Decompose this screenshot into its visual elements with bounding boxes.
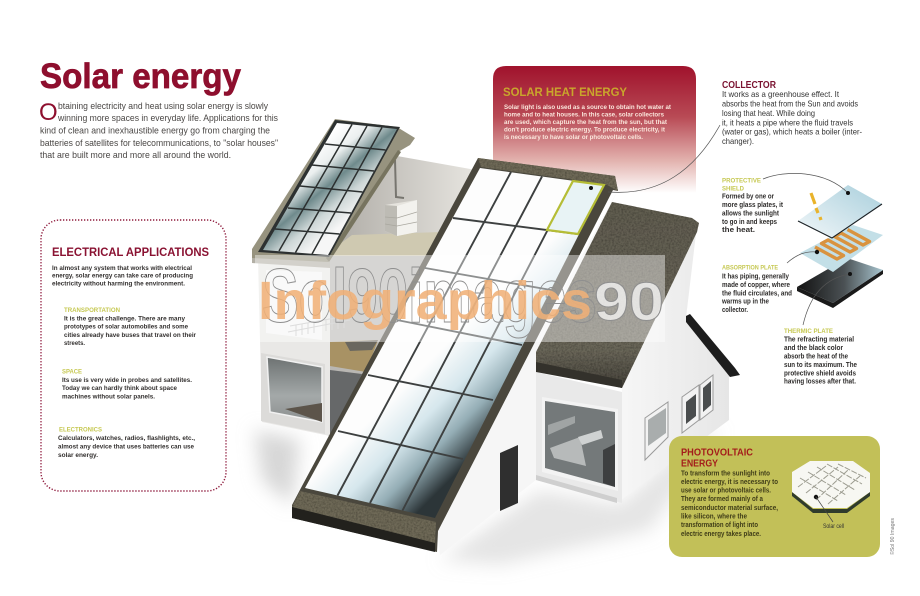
intro text: btaining electricity and heat using solar energy is slowly — [58, 101, 268, 111]
thermic plate text: The refracting material — [784, 337, 854, 344]
thermic plate text: protective shield avoids — [784, 370, 856, 377]
transportation block: streets. — [64, 340, 85, 347]
protective shield text: the heat. — [722, 227, 755, 234]
railing — [288, 315, 352, 336]
attic floor — [322, 232, 442, 258]
photovoltaic text: like silicon, where the — [681, 514, 747, 520]
electrical intro text: electricity without harming the environment. — [52, 280, 185, 287]
highlighted collector — [547, 181, 604, 234]
house illustration — [252, 119, 740, 565]
wood floor — [330, 340, 378, 372]
credit: ©Sol 90 Images — [889, 518, 896, 555]
thermic plate text — [784, 328, 857, 386]
solar heat text: don't produce electric energy. To produce electricity, it — [504, 126, 666, 134]
electrical intro text: In almost any system that works with electrical — [52, 265, 192, 272]
eave — [292, 491, 436, 543]
solar heat text: home and to heat houses. In this case, solar collectors — [504, 112, 664, 119]
intro text: that are built more and more all around the world. — [40, 150, 231, 160]
panel: solar heat energy — [493, 66, 696, 193]
thermic plate text: and the black color — [784, 345, 843, 352]
solar heat text: Solar light is also used as a source to obtain hot water at — [504, 104, 672, 111]
thermic plate text: THERMIC PLATE — [784, 328, 834, 335]
lower window — [261, 353, 325, 434]
ridge — [478, 158, 618, 191]
left solar panels — [258, 120, 400, 257]
solar cell label: Solar cell — [823, 524, 844, 530]
watermark: 90 — [594, 272, 664, 332]
heading: electrical applications: ELECTRICAL APPLICATIONS — [52, 247, 209, 259]
electronics block: ELECTRONICS — [59, 427, 103, 434]
side wall — [617, 225, 729, 503]
photovoltaic text: electric energy, it is necessary to — [681, 479, 778, 486]
absorption plate text: collector. — [722, 307, 748, 314]
pipe — [395, 160, 404, 198]
heading: photovoltaic energy: ENERGY — [681, 459, 718, 470]
collector text: (water or gas), which heats a boiler (inter- — [722, 128, 862, 136]
thermic plate text: absorb the heat of the — [784, 354, 848, 361]
space block: Its use is very wide in probes and satellites. — [62, 377, 192, 384]
heading: solar heat energy: SOLAR HEAT ENERGY — [503, 85, 627, 99]
watermark: Sol90images — [262, 254, 597, 339]
protective shield text: PROTECTIVE — [722, 178, 762, 184]
collector text: changer). — [722, 137, 754, 146]
space block — [62, 369, 192, 401]
transportation block: cities already have buses that travel on their — [64, 332, 196, 339]
arrow: protective shield callout — [763, 173, 850, 195]
collector text — [722, 80, 862, 146]
drop cap: O — [39, 99, 58, 126]
watermark: Infographics — [258, 271, 592, 331]
door — [500, 445, 518, 511]
protective shield text: more glass plates, it — [722, 202, 784, 209]
electrical intro text — [52, 265, 193, 287]
collector exploded diagram — [797, 185, 883, 308]
protective shield text: to go in and keeps — [722, 219, 777, 226]
panel: photovoltaic energy — [669, 436, 880, 557]
title: Solar energy — [40, 57, 241, 96]
front wall — [258, 258, 330, 436]
icon: solar cell — [792, 461, 870, 530]
right house — [436, 190, 740, 555]
sun rays — [811, 193, 821, 220]
boiler — [385, 200, 417, 236]
absorption plate text: made of copper, where — [722, 282, 790, 289]
roof frame — [292, 158, 618, 552]
balcony room — [266, 270, 322, 340]
absorption plate — [800, 225, 883, 272]
front wall — [536, 372, 622, 503]
photovoltaic text: They are formed mainly of a — [681, 496, 763, 503]
protective shield text: SHIELD — [722, 186, 744, 193]
heading: photovoltaic energy: PHOTOVOLTAIC — [681, 448, 753, 459]
electronics block — [58, 427, 195, 459]
rear eave — [686, 314, 740, 377]
space block: SPACE — [62, 369, 83, 376]
transportation block — [64, 307, 196, 347]
protective shield — [798, 185, 882, 238]
transportation block: It is the great challenge. There are many — [64, 316, 185, 322]
central roof — [292, 158, 618, 552]
photovoltaic text: To transform the sunlight into — [681, 470, 770, 477]
solar heat text: is necessary to have solar or photovoltaic cells. — [504, 134, 643, 141]
collector text: absorbs the heat from the Sun and avoids — [722, 100, 858, 108]
space block: Today we can hardly think about space — [62, 385, 177, 392]
transportation block: TRANSPORTATION — [64, 307, 120, 314]
thermic plate text: having losses after that. — [784, 379, 856, 386]
left roof frame — [252, 119, 415, 262]
thermic plate — [797, 258, 883, 308]
intro text: batteries of satellites for telecommunications, to "solar houses" — [40, 138, 278, 148]
intro text: winning more spaces in everyday life. Applications for this — [57, 113, 278, 123]
absorption plate text — [721, 265, 792, 314]
space block: machines without solar panels. — [62, 394, 155, 401]
intro text: kind of clean and inexhaustible energy go from charging the — [40, 126, 270, 136]
collector text: It works as a greenhouse effect. It — [722, 90, 840, 99]
protective shield text: Formed by one or — [722, 194, 774, 201]
photovoltaic text: semiconductor material surface, — [681, 505, 778, 512]
electronics block: Calculators, watches, radios, flashlights, etc., — [58, 435, 195, 442]
ground shadows — [255, 430, 720, 565]
protective shield text — [722, 178, 784, 234]
left house — [252, 119, 476, 436]
side windows — [645, 375, 713, 460]
arrow: collector callout — [589, 125, 720, 192]
absorption plate text: ABSORPTION PLATE — [722, 265, 779, 272]
photovoltaic text: use solar or photovoltaic cells. — [681, 488, 771, 494]
solar heat text: are used, which capture the heat from the sun, but that — [504, 119, 668, 126]
absorption plate text: the fluid circulates, and — [722, 290, 792, 297]
dark interior strip — [330, 370, 362, 434]
collector text: COLLECTOR — [722, 80, 777, 91]
electronics block: almost any device that uses batteries can use — [58, 444, 194, 451]
glass — [305, 168, 604, 518]
electrical intro text: energy, solar energy can take care of producing — [52, 273, 193, 280]
heading: photovoltaic energy — [681, 448, 753, 470]
transportation block: prototypes of solar automobiles and some — [64, 324, 188, 331]
right roof — [536, 202, 699, 388]
protective shield text: allows the sunlight — [722, 211, 780, 218]
arrow: absorption plate callout — [787, 250, 819, 263]
upper interior wall — [330, 156, 476, 258]
solar heat text — [504, 104, 672, 141]
photovoltaic text: transformation of light into — [681, 522, 758, 529]
fascia band — [252, 255, 330, 268]
absorption plate text: warms up in the — [721, 299, 769, 306]
interior back wall — [328, 256, 432, 436]
glass grid — [338, 172, 578, 510]
collector text: losing that heat. While doing — [722, 109, 815, 118]
electronics block: solar energy. — [58, 452, 98, 459]
big kitchen window — [542, 397, 618, 491]
absorption plate text: It has piping, generally — [722, 274, 789, 281]
intro text — [39, 99, 278, 160]
thermic plate text: sun to its maximum. The — [784, 362, 857, 369]
middle wall — [436, 190, 618, 555]
collector text: it, it heats a pipe where the fluid travels — [722, 118, 853, 128]
panel: electrical applications — [41, 220, 226, 491]
photovoltaic text: electric energy takes place. — [681, 531, 761, 538]
arrow: thermic plate callout — [803, 272, 852, 325]
photovoltaic text — [681, 470, 778, 538]
